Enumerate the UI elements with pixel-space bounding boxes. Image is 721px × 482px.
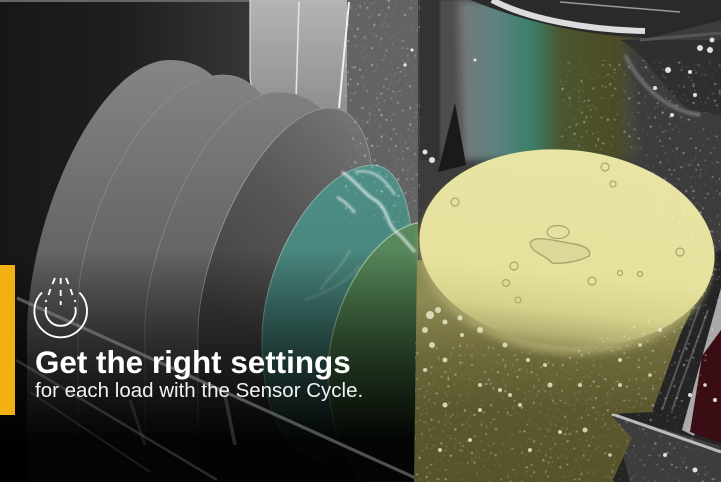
text block [35, 345, 363, 402]
gray plates [27, 60, 372, 482]
lower shadow [0, 250, 425, 482]
accent bar [0, 265, 15, 415]
teal plate [262, 165, 412, 457]
wire rack [16, 298, 420, 480]
water droplets [345, 0, 721, 482]
heading: Get the right settings [35, 345, 351, 380]
subheading: for each load with the Sensor Cycle. [35, 379, 363, 402]
splash on teal plate [305, 171, 415, 300]
green plate [328, 222, 422, 482]
cup [410, 135, 721, 482]
right side machine interior [418, 0, 721, 482]
icon: water puddle on lid [530, 239, 590, 263]
back plates upright [250, 0, 420, 230]
